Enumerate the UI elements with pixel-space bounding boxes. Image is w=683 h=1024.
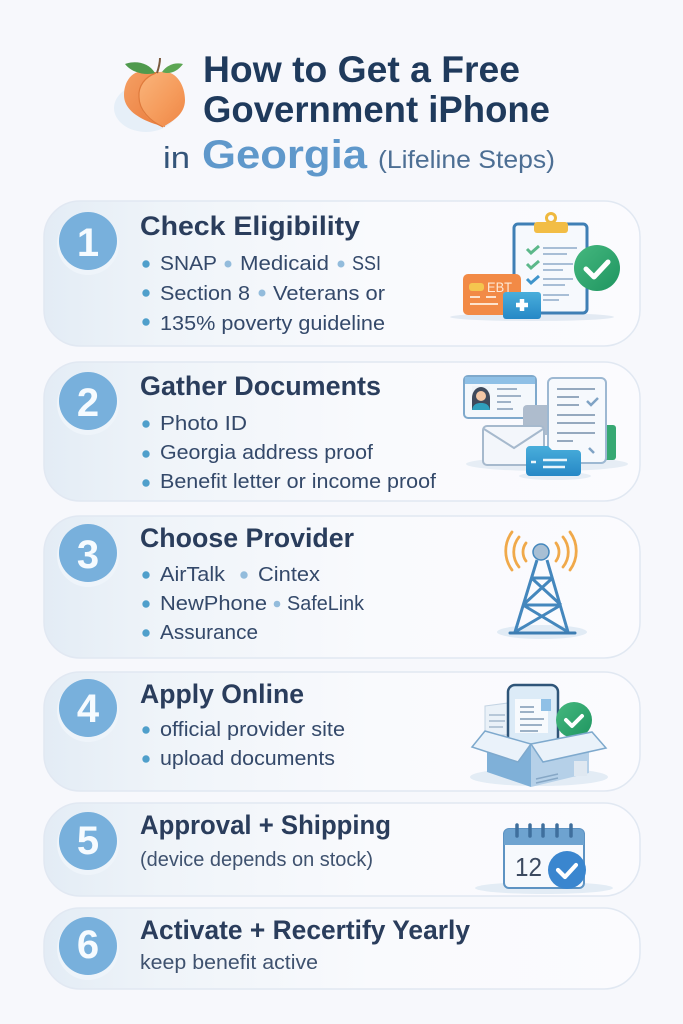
panel: step 1 check eligibility xyxy=(44,201,640,346)
panel: step 4 apply online xyxy=(44,672,640,791)
heading line 3: Georgia xyxy=(202,133,368,177)
eligibility list: Section 8 xyxy=(160,283,250,305)
step number 2 xyxy=(57,372,119,435)
icon: phone in box xyxy=(470,685,608,787)
step number 1 xyxy=(57,212,119,275)
eligibility list: Veterans or xyxy=(273,283,385,305)
step number 5: 5 xyxy=(77,819,99,863)
panel: step 6 activate and recertify xyxy=(44,908,640,989)
step number 6 xyxy=(57,917,119,980)
heading: Apply Online xyxy=(140,679,304,709)
provider list xyxy=(142,564,365,644)
heading: Check Eligibility xyxy=(140,211,360,241)
step number 1: 1 xyxy=(77,221,99,265)
heading line 2: Government iPhone xyxy=(203,89,550,130)
heading line 1: How to Get a Free xyxy=(203,49,520,90)
eligibility list xyxy=(142,253,385,335)
heading line 3 xyxy=(163,133,555,177)
heading: Activate + Recertify Yearly xyxy=(140,915,470,945)
step number 6: 6 xyxy=(77,923,99,967)
documents list: Photo ID xyxy=(160,413,247,435)
panel: step 5 approval and shipping xyxy=(44,803,640,896)
eligibility list: SNAP xyxy=(160,253,217,275)
step number 2: 2 xyxy=(77,381,99,425)
provider list: Assurance xyxy=(160,622,258,644)
step number 3: 3 xyxy=(77,533,99,577)
heading: Approval + Shipping xyxy=(140,810,391,840)
icon: clipboard with EBT card xyxy=(450,214,620,321)
icon: calendar xyxy=(475,825,613,894)
provider list: Cintex xyxy=(258,564,320,586)
documents list: Georgia address proof xyxy=(160,442,373,464)
icon: clipboard with EBT card: EBT xyxy=(487,279,512,295)
heading: Gather Documents xyxy=(140,371,381,401)
eligibility list: Medicaid xyxy=(240,253,329,275)
eligibility list: SSI xyxy=(352,253,381,275)
eligibility list: 135% poverty guideline xyxy=(160,313,385,335)
note: keep benefit active xyxy=(140,952,318,974)
provider list: NewPhone xyxy=(160,593,267,615)
panel: step 2 gather documents xyxy=(44,362,640,501)
note: (device depends on stock) xyxy=(140,849,373,871)
panel: step 3 choose provider xyxy=(44,516,640,658)
documents list: Benefit letter or income proof xyxy=(160,471,436,493)
icon: calendar: 12 xyxy=(515,852,542,882)
heading: Choose Provider xyxy=(140,523,354,553)
provider list: AirTalk xyxy=(160,564,226,586)
icon: cell tower xyxy=(497,532,587,639)
icon: peach xyxy=(114,58,185,132)
heading line 3: in xyxy=(163,140,190,175)
apply list xyxy=(142,719,345,770)
step number 3 xyxy=(57,524,119,587)
step number 4: 4 xyxy=(77,687,100,731)
provider list: SafeLink xyxy=(287,593,365,615)
documents list xyxy=(142,413,436,493)
icon: ID card, envelope and papers xyxy=(464,376,628,480)
step number 4 xyxy=(57,679,119,742)
heading line 3: (Lifeline Steps) xyxy=(378,146,555,174)
apply list: upload documents xyxy=(160,748,335,770)
title block xyxy=(114,49,555,177)
apply list: official provider site xyxy=(160,719,345,741)
step number 5 xyxy=(57,812,119,875)
